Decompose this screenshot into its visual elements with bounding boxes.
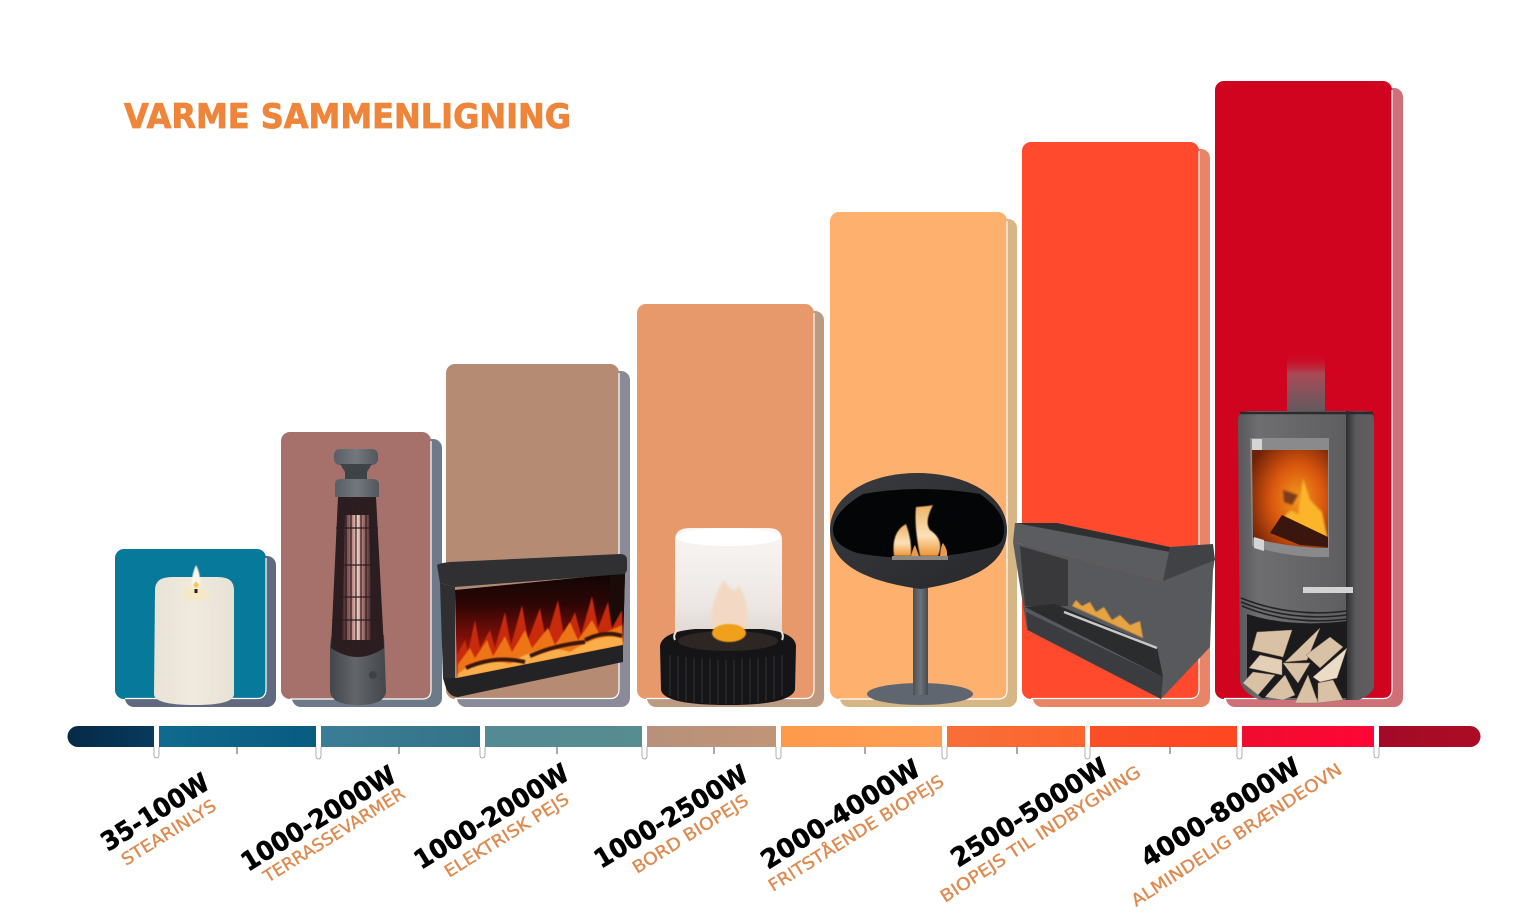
panel: bord biopejs bar: [637, 304, 824, 707]
icon: candle: [154, 565, 234, 705]
icon: electric fireplace: [437, 554, 627, 697]
label: 2000-4000W fritstaaende biopejs: 2000-4000W: [756, 754, 926, 876]
icon: hanging pod bio fireplace: [830, 473, 1007, 705]
icon: built-in bio fireplace: [1013, 523, 1215, 699]
label: 4000-8000W almindelig braendeovn: ALMINDELIG BRÆNDEOVN: [1128, 760, 1346, 911]
panel: braendeovn bar: [1215, 81, 1403, 707]
panel: fritstaende biopejs bar: [830, 212, 1017, 707]
icon: patio heater: [330, 449, 386, 705]
icon: wood stove: [1238, 352, 1374, 703]
icon: table bio burner: [660, 528, 796, 705]
title: VARME SAMMENLIGNING: [124, 97, 571, 137]
label: 35-100W stearinlys: STEARINLYS: [118, 796, 220, 870]
label: 2000-4000W fritstaaende biopejs: FRITSTÅENDE BIOPEJS: [764, 770, 948, 896]
label: 1000-2000W elektrisk pejs: 1000-2000W: [409, 758, 575, 876]
label: 4000-8000W almindelig braendeovn: 4000-8000W: [1136, 752, 1306, 874]
panel: biopejs til indbygning bar: [1022, 142, 1210, 707]
label: 1000-2000W terrassevarmer: TERRASSEVARMER: [259, 784, 409, 888]
panel: elektrisk pejs bar: [446, 364, 630, 707]
label: 1000-2500W bord biopejs: 1000-2500W: [589, 760, 754, 875]
label: 2500-5000W biopejs til indbygning: BIOPEJS TIL INDBYGNING: [937, 762, 1145, 907]
label: 1000-2000W elektrisk pejs: ELEKTRISK PEJS: [441, 790, 573, 882]
panel: terrassevarmer bar: [281, 432, 442, 707]
label: 35-100W stearinlys: 35-100W: [96, 768, 215, 858]
label: 1000-2500W bord biopejs: BORD BIOPEJS: [629, 791, 752, 878]
label: 1000-2000W terrassevarmer: 1000-2000W: [236, 760, 402, 878]
scale bar: [68, 726, 1480, 759]
panel: stearinlys bar: [115, 549, 276, 707]
label: 2500-5000W biopejs til indbygning: 2500-5000W: [946, 752, 1114, 874]
